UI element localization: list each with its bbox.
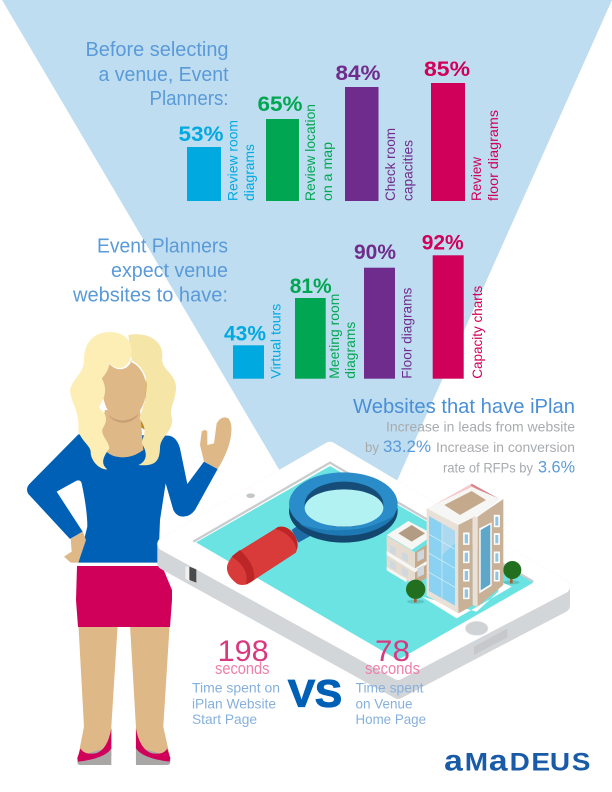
- stats: websites that have iPlan: [353, 396, 575, 477]
- comparison: venue home page time: [356, 635, 426, 727]
- heading: event planners expect: [72, 236, 228, 307]
- bar: meeting room diagrams 81%: diagrams: [342, 322, 358, 379]
- stats: websites that have iPlan: 33.2%: [383, 437, 431, 456]
- heading: before selecting a venue: a venue, Event: [98, 64, 229, 86]
- logo: Amadeus: a: [489, 743, 508, 777]
- bar: floor diagrams 90%: 90%: [354, 241, 396, 264]
- bar: review floor diagrams 85%: [424, 58, 501, 201]
- bar: capacity charts 92%: [422, 231, 485, 379]
- woman: upper body: [27, 332, 231, 563]
- magnifier handle: [227, 527, 298, 585]
- bar: review location on a map 65%: [258, 93, 335, 201]
- bar: floor diagrams 90%: [354, 241, 415, 379]
- comparison: venue home page time: on Venue: [356, 696, 413, 712]
- heading: before selecting a venue: Planners:: [150, 88, 228, 110]
- comparison: venue home page time: Time spent: [356, 680, 424, 696]
- heading: event planners expect: expect venue: [111, 260, 228, 282]
- background funnel: [2, 0, 612, 588]
- stats: websites that have iPlan: 3.6%: [538, 458, 575, 477]
- tree left: [406, 580, 425, 604]
- logo: Amadeus: a: [444, 743, 463, 777]
- logo: Amadeus: S: [572, 748, 590, 776]
- heading: before selecting a venue: Before selecting: [86, 39, 228, 61]
- bar: review room diagrams 53%: 53%: [178, 123, 224, 146]
- bar: virtual tours 43%: [224, 304, 284, 379]
- bar: review location on a map 65%: on a map: [319, 142, 335, 201]
- woman figure: [27, 332, 231, 765]
- bar: review location on a map 65%: 65%: [258, 93, 303, 116]
- bar: virtual tours 43%: Virtual tours: [268, 304, 284, 379]
- heading: before selecting a venue: [86, 39, 229, 110]
- logo: Amadeus: D: [510, 748, 530, 776]
- bar: check room capacities 84%: capacities: [400, 140, 416, 201]
- bar: review room diagrams 53%: [178, 120, 257, 201]
- heading: event planners expect: Event Planners: [97, 236, 228, 258]
- tablet: body: [164, 448, 563, 692]
- bar chart: before selecting a venue: [178, 58, 501, 201]
- comparison: iPlan website time: [192, 635, 280, 727]
- bar: capacity charts 92%: 92%: [422, 231, 464, 254]
- bar: review location on a map 65%: Review location: [302, 104, 318, 201]
- bar: floor diagrams 90%: Floor diagrams: [399, 288, 415, 379]
- heading: event planners expect: websites to have:: [72, 285, 228, 307]
- stats: websites that have iPlan: rate of RFPs by: [443, 460, 533, 476]
- small building: [387, 521, 428, 586]
- tall building: [422, 484, 512, 618]
- bar: review floor diagrams 85%: Review: [468, 156, 484, 201]
- bar: check room capacities 84%: 84%: [336, 62, 381, 85]
- stats: websites that have iPlan: by: [365, 439, 379, 455]
- logo: Amadeus: U: [550, 748, 570, 776]
- stats: websites that have iPlan: Websites that have iPlan: [353, 396, 575, 418]
- stats: websites that have iPlan: Increase in leads from website: [386, 419, 575, 435]
- stats: websites that have iPlan: Increase in conversion: [436, 439, 575, 455]
- comparison: venue home page time: Home Page: [356, 711, 426, 727]
- comparison: venue home page time: seconds: [365, 659, 420, 678]
- bar: meeting room diagrams 81%: Meeting room: [326, 294, 342, 379]
- bar: review room diagrams 53%: diagrams: [241, 144, 257, 201]
- bar: meeting room diagrams 81%: 81%: [290, 275, 332, 298]
- bar: check room capacities 84%: Check room: [382, 128, 398, 201]
- comparison: iPlan website time: Start Page: [192, 711, 257, 727]
- logo: Amadeus: E: [531, 748, 550, 776]
- woman: skirt: [76, 566, 172, 627]
- tablet: buttons and port: [185, 493, 507, 655]
- woman: legs and shoes: [77, 627, 170, 765]
- tree right: [503, 561, 521, 584]
- bar: check room capacities 84%: [336, 62, 416, 201]
- comparison: iPlan website time: Time spent on: [192, 680, 280, 696]
- comparison: iPlan website time: 198: [218, 635, 269, 668]
- logo: Amadeus: M: [465, 748, 488, 776]
- bar: review floor diagrams 85%: floor diagrams: [485, 110, 501, 201]
- VS label: VS: [288, 674, 342, 716]
- bar: capacity charts 92%: Capacity charts: [469, 286, 485, 379]
- bar: review room diagrams 53%: Review room: [224, 120, 240, 201]
- bar: meeting room diagrams 81%: [290, 275, 358, 379]
- tablet: screen: [193, 463, 533, 660]
- bar chart: venue websites expectations: [224, 231, 485, 379]
- bar: review floor diagrams 85%: 85%: [424, 58, 470, 81]
- comparison: iPlan website time: iPlan Website: [192, 696, 276, 712]
- bar: virtual tours 43%: 43%: [224, 323, 266, 346]
- tablet illustration: [164, 448, 563, 692]
- magnifying glass: [227, 472, 398, 585]
- comparison: iPlan website time: seconds: [215, 659, 270, 678]
- comparison: venue home page time: 78: [375, 635, 410, 668]
